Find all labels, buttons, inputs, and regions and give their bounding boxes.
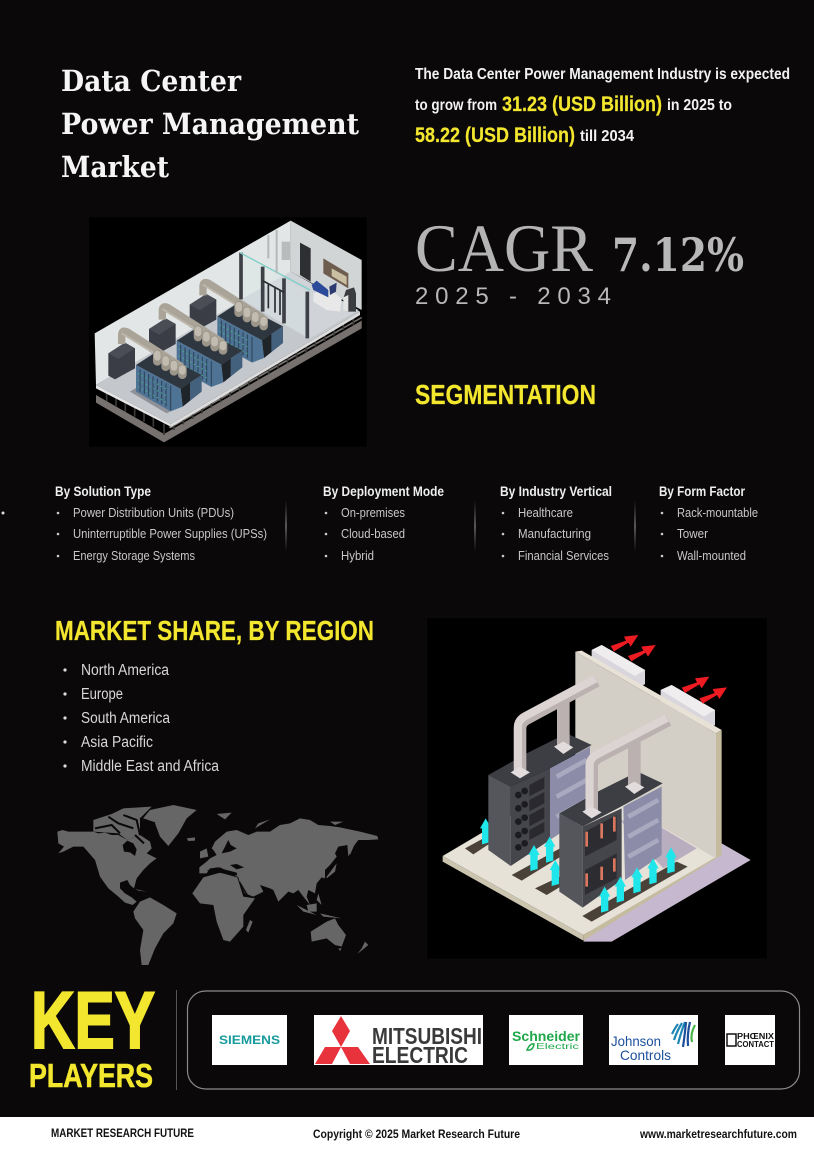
wall xyxy=(575,652,716,858)
segment: solution type: Uninterruptible Power Supplies (UPSs) xyxy=(73,527,267,541)
floor xyxy=(96,272,360,424)
duct two xyxy=(615,742,653,787)
divider xyxy=(176,990,177,1090)
logo: Mitsubishi Electric: ELECTRIC xyxy=(372,1042,468,1068)
logo: Johnson Controls xyxy=(609,1015,698,1065)
segment: form factor xyxy=(659,483,758,563)
market growth statement: 31.23 (USD Billion) xyxy=(502,93,662,116)
logo: Schneider Electric: Schneider xyxy=(512,1028,581,1044)
segment: deployment mode xyxy=(323,483,444,563)
footer xyxy=(0,1117,814,1150)
segment: form factor: Tower xyxy=(677,527,708,541)
footer: www.marketresearchfuture.com xyxy=(639,1129,797,1141)
segment: solution type: Power Distribution Units (PDUs) xyxy=(73,506,234,520)
illustration: data center room xyxy=(89,217,367,447)
segment: solution type: Energy Storage Systems xyxy=(73,549,195,563)
footer: MARKET RESEARCH FUTURE xyxy=(51,1128,194,1140)
market growth statement xyxy=(415,66,790,147)
rack group one xyxy=(488,733,592,787)
rack group two xyxy=(559,772,663,827)
logo: Schneider Electric: Electric xyxy=(536,1042,579,1051)
cream platform xyxy=(443,777,717,935)
key players heading xyxy=(29,976,155,1094)
logo: Mitsubishi Electric: MITSUBISHI xyxy=(372,1023,482,1049)
CAGR xyxy=(415,210,744,310)
arrows rack two xyxy=(599,887,610,913)
region list: Asia Pacific xyxy=(81,734,153,751)
arrows rack one xyxy=(528,845,540,871)
door and board xyxy=(300,243,311,282)
duct one xyxy=(544,702,582,748)
logo: Siemens: SIEMENS xyxy=(219,1033,280,1047)
title: Market xyxy=(61,150,170,184)
region list: Europe xyxy=(81,686,123,703)
cooling units, racks and ducts, back to front xyxy=(190,282,283,363)
key players panel xyxy=(188,991,800,1089)
segment: industry vertical: Healthcare xyxy=(518,506,573,520)
segment: deployment mode: On-premises xyxy=(341,506,405,520)
title: Data Center xyxy=(61,64,242,98)
heading: market share: MARKET SHARE, BY REGION xyxy=(55,615,374,646)
glass partition xyxy=(241,253,307,338)
floor vents xyxy=(465,838,490,854)
logo: Phoenix Contact: CONTACT xyxy=(737,1040,774,1049)
segment: industry vertical xyxy=(500,483,612,563)
region list xyxy=(63,662,219,775)
market growth statement: to grow from xyxy=(415,97,497,114)
footer: Copyright © 2025 Market Research Future xyxy=(313,1129,520,1141)
segment: form factor: Rack-mountable xyxy=(677,506,758,520)
logo: Phoenix Contact: PHŒNIX xyxy=(737,1032,775,1041)
arrows behind xyxy=(480,818,491,844)
segment: form factor: By Form Factor xyxy=(659,483,745,499)
segment: solution type xyxy=(55,483,267,563)
region list: Middle East and Africa xyxy=(81,758,219,775)
segment: form factor: Wall-mounted xyxy=(677,549,746,563)
segment: deployment mode: Hybrid xyxy=(341,549,374,563)
segment: deployment mode: Cloud-based xyxy=(341,527,405,541)
CAGR: 7.12% xyxy=(612,228,744,282)
logo: Mitsubishi Electric xyxy=(314,1015,483,1068)
region list: North America xyxy=(81,662,169,679)
segment: industry vertical: Financial Services xyxy=(518,549,609,563)
base slab xyxy=(96,317,362,442)
logo: Phoenix Contact xyxy=(725,1015,775,1065)
title xyxy=(61,64,360,184)
market growth statement: in 2025 to xyxy=(667,97,732,114)
walls xyxy=(95,221,291,385)
segment: industry vertical: By Industry Vertical xyxy=(500,483,612,499)
market growth statement: till 2034 xyxy=(580,128,634,145)
logo: Johnson Controls: Johnson xyxy=(611,1033,661,1049)
desk xyxy=(313,288,342,312)
title: Power Management xyxy=(61,107,360,141)
key players heading: KEY xyxy=(31,976,155,1066)
segment: solution type: By Solution Type xyxy=(55,483,151,499)
white exhaust boxes and red arrows xyxy=(592,645,645,687)
purple floor xyxy=(583,827,751,942)
key players heading: PLAYERS xyxy=(29,1057,153,1094)
CAGR: 2025 - 2034 xyxy=(415,283,611,310)
segment: industry vertical: Manufacturing xyxy=(518,527,591,541)
logo: Schneider Electric xyxy=(509,1015,583,1065)
illustration: server racks and airflow xyxy=(427,618,767,958)
logo: Siemens xyxy=(212,1015,287,1065)
region list: South America xyxy=(81,710,170,727)
market growth statement: 58.22 (USD Billion) xyxy=(415,124,575,147)
logo: Johnson Controls: Controls xyxy=(620,1047,671,1063)
segment: deployment mode: By Deployment Mode xyxy=(323,483,444,499)
inland seas and straits xyxy=(123,841,137,856)
world map xyxy=(57,805,378,965)
segmentation stray bullet xyxy=(2,512,4,514)
heading: segmentation: SEGMENTATION xyxy=(415,379,596,410)
CAGR: CAGR xyxy=(415,210,594,286)
